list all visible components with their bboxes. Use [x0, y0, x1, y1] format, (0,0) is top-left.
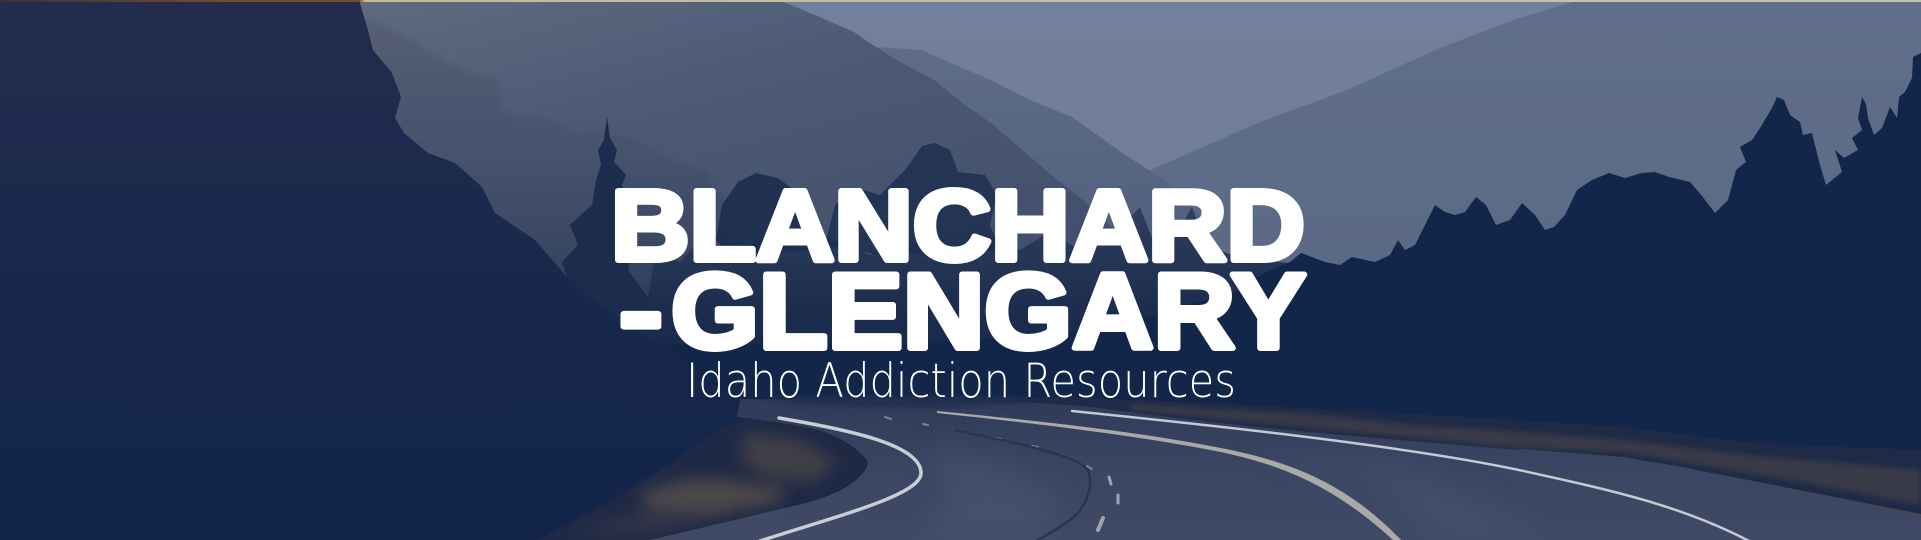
- spruce tree left of title: [558, 117, 650, 400]
- title line one: BLANCHARD: [611, 170, 1305, 282]
- pavement crack: [955, 430, 1090, 540]
- right forest silhouette: [640, 53, 1921, 540]
- left white edge line: [760, 418, 921, 540]
- near left mountain: [360, 0, 1130, 330]
- lighter band right of centre line: [1240, 440, 1560, 540]
- road surface: [645, 399, 1921, 540]
- title line two: GLENGARY: [671, 251, 1306, 371]
- tan top edge strip: [0, 0, 1921, 2]
- double centre line: [937, 411, 1402, 540]
- hazy left forest: [365, 16, 760, 320]
- right roadside grass: [1000, 397, 1921, 525]
- lighter pavement band: [920, 445, 1060, 540]
- road shading: [760, 396, 1560, 540]
- left roadside grass: [538, 417, 867, 540]
- tan grass patch upper: [740, 432, 838, 482]
- dashed lane mark closest: [1098, 518, 1103, 530]
- pine crown behind title left: [716, 173, 819, 255]
- pine crown behind title centre: [825, 143, 1000, 255]
- dim grass lower edge: [570, 508, 730, 535]
- dashed lane marks far: [885, 417, 1092, 469]
- subtitle: Idaho Addiction Resources: [686, 354, 1236, 409]
- title: [611, 170, 1306, 371]
- centre forest body: [640, 207, 1300, 420]
- title line two: -: [619, 251, 663, 371]
- right white edge line: [1072, 411, 1749, 540]
- shadow across far road: [760, 396, 1040, 408]
- tan grass patch lower: [640, 478, 785, 516]
- dashed lane marks near: [1109, 477, 1118, 503]
- far right mountain: [1146, 0, 1921, 320]
- left cliff and dark foreground trees: [0, 0, 745, 540]
- road markings: [760, 411, 1749, 540]
- second ridge: [860, 47, 1200, 320]
